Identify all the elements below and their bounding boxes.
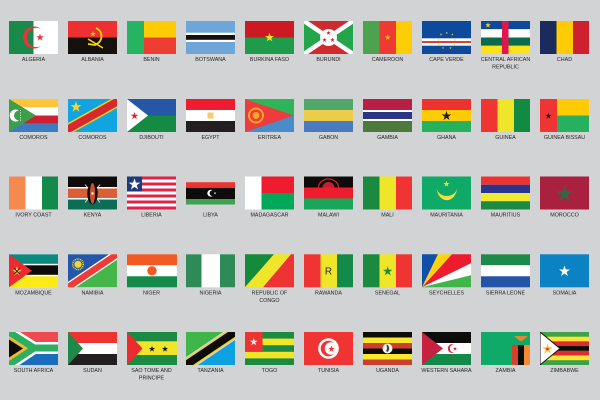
flag: Togo: TOGO xyxy=(262,368,277,374)
flag: Albania xyxy=(68,21,117,63)
flag: Mauritania xyxy=(422,176,471,219)
flag: Cape Verde: CAPE VERDE xyxy=(429,57,464,63)
flag: Eritrea: ERITREA xyxy=(258,135,282,141)
flag: Rwanda xyxy=(304,254,353,296)
flag: Madagascar xyxy=(245,176,294,219)
flag: Chad xyxy=(540,21,589,63)
flag: Botswana xyxy=(186,21,235,63)
flag: Comoros (second) xyxy=(68,99,117,141)
flag: Albania: ALBANIA xyxy=(81,57,104,63)
flag: Madagascar: MADAGASCAR xyxy=(250,213,289,219)
flag: Seychelles: SEYCHELLES xyxy=(429,291,464,297)
flag: Ivory Coast xyxy=(9,176,58,219)
flag: Sudan xyxy=(68,332,117,374)
flag: Ghana: GHANA xyxy=(437,135,456,141)
flag: Namibia: NAMIBIA xyxy=(82,291,104,297)
flag: Republic of Congo: REPUBLIC OF xyxy=(252,291,288,297)
flag: Central African Republic: REPUBLIC xyxy=(492,64,519,70)
flag: Malawi xyxy=(304,176,353,219)
flag: Comoros (second): COMOROS xyxy=(78,135,107,141)
flag: Uganda xyxy=(363,332,412,374)
flag: Cameroon: CAMEROON xyxy=(372,57,403,63)
flag: Libya: LIBYA xyxy=(203,213,218,219)
flag: Egypt xyxy=(186,99,235,141)
flag: Nigeria xyxy=(186,254,235,296)
flag: Gambia: GAMBIA xyxy=(377,135,398,141)
flag: Rwanda: R xyxy=(325,266,332,277)
flag: Burkina Faso: BURKINA FASO xyxy=(250,57,289,63)
flag: Comoros: COMOROS xyxy=(19,135,48,141)
flag: Senegal xyxy=(363,254,412,296)
flag: Togo xyxy=(245,332,294,374)
flag: Malawi: MALAWI xyxy=(318,213,339,219)
flag: Somalia xyxy=(540,254,589,296)
flag: Mauritania: MAURITANIA xyxy=(430,213,463,219)
flag: Rwanda: RAWANDA xyxy=(315,291,342,297)
flag: Niger: NIGER xyxy=(143,291,160,297)
flag: Mauritius xyxy=(481,176,530,219)
flag: Gabon xyxy=(304,99,353,141)
flag: Gambia xyxy=(363,99,412,141)
flag: Mozambique: MOZAMBIQUE xyxy=(15,291,52,297)
flag: Tunisia xyxy=(304,332,353,374)
flag: Cameroon xyxy=(363,21,412,63)
flag: Djibouti xyxy=(127,99,176,141)
flag: Benin: BENIN xyxy=(143,57,160,63)
flag: Tanzania: TANZANIA xyxy=(197,368,224,374)
flag: Sierra Leone xyxy=(481,254,530,296)
flag: Republic of Congo xyxy=(245,254,294,304)
flag: Sudan: SUDAN xyxy=(83,368,102,374)
flag: Cape Verde xyxy=(422,21,471,63)
flag: Gabon: GABON xyxy=(319,135,338,141)
flag: Guinea: GUINEA xyxy=(495,135,516,141)
flag: Zambia xyxy=(481,332,530,374)
flag: Burkina Faso xyxy=(245,21,294,63)
flag: Zambia: ZAMBIA xyxy=(496,368,516,374)
flag: South Africa xyxy=(9,332,58,372)
flag: Central African Republic xyxy=(481,21,530,70)
flag: Chad: CHAD xyxy=(557,57,572,63)
flag: Namibia xyxy=(68,254,117,294)
flag: Niger xyxy=(127,254,177,296)
flag: Mozambique xyxy=(9,254,58,296)
flag: Algeria xyxy=(9,21,58,63)
flag: Republic of Congo: CONGO xyxy=(259,298,280,304)
flag: Eritrea xyxy=(245,99,294,141)
flag: Botswana: BOTSWANA xyxy=(195,57,226,63)
flag: Kenya: KENYA xyxy=(84,213,102,219)
flag: Senegal: SENEGAL xyxy=(375,291,400,297)
flag: Sao Tome and Principe xyxy=(127,332,177,382)
flag: Benin xyxy=(127,21,176,63)
flag: Uganda: UGANDA xyxy=(376,368,399,374)
flag: Liberia xyxy=(127,176,176,219)
flag: Nigeria: NIGERIA xyxy=(200,291,222,297)
flag: Guinea Bissau xyxy=(540,99,589,141)
flag: Seychelles xyxy=(422,254,471,296)
flag: Mali xyxy=(363,176,412,219)
flag: Central African Republic: CENTRAL AFRICAN xyxy=(481,57,530,63)
flag: Egypt: EGYPT xyxy=(201,135,220,141)
flag: Somalia: SOMALIA xyxy=(553,291,577,297)
flag: Comoros xyxy=(9,99,58,141)
flag: Libya xyxy=(186,182,235,219)
flag: Guinea xyxy=(481,99,530,141)
flag: Sao Tome and Principe: SAO TOME AND xyxy=(131,368,172,374)
flag: Zimbabwe xyxy=(540,332,589,374)
flag: Western Sahara: WESTERN SAHARA xyxy=(421,368,472,374)
flag: Western Sahara xyxy=(421,332,472,374)
flag: Burundi: BURUNDI xyxy=(316,57,341,63)
flag: Guinea Bissau: GUINEA BISSAU xyxy=(544,135,585,141)
flag: Morocco xyxy=(540,176,589,219)
flag: Burundi xyxy=(304,21,353,61)
flag: Liberia: LIBERIA xyxy=(141,213,162,219)
flag: Kenya xyxy=(68,176,117,219)
flag: Zimbabwe: ZIMBABWE xyxy=(550,368,579,374)
flag: Sierra Leone: SIERRA LEONE xyxy=(486,291,526,297)
flag: Morocco: MOROCCO xyxy=(550,213,579,219)
flag: Tanzania xyxy=(186,332,235,372)
flag: Sao Tome and Principe: PRINCIPE xyxy=(139,376,165,382)
flag: Tunisia: TUNISIA xyxy=(318,368,339,374)
flag: Algeria: ALGERIA xyxy=(22,57,46,63)
flag: South Africa: SOUTH AFRICA xyxy=(14,368,54,374)
flag: Djibouti: DJIBOUTI xyxy=(139,135,164,141)
flag: Mali: MALI xyxy=(381,213,394,219)
flag: Ghana xyxy=(422,99,471,141)
flag: Mauritius: MAURITIUS xyxy=(491,213,521,219)
flag: Ivory Coast: IVORY COAST xyxy=(15,213,52,219)
